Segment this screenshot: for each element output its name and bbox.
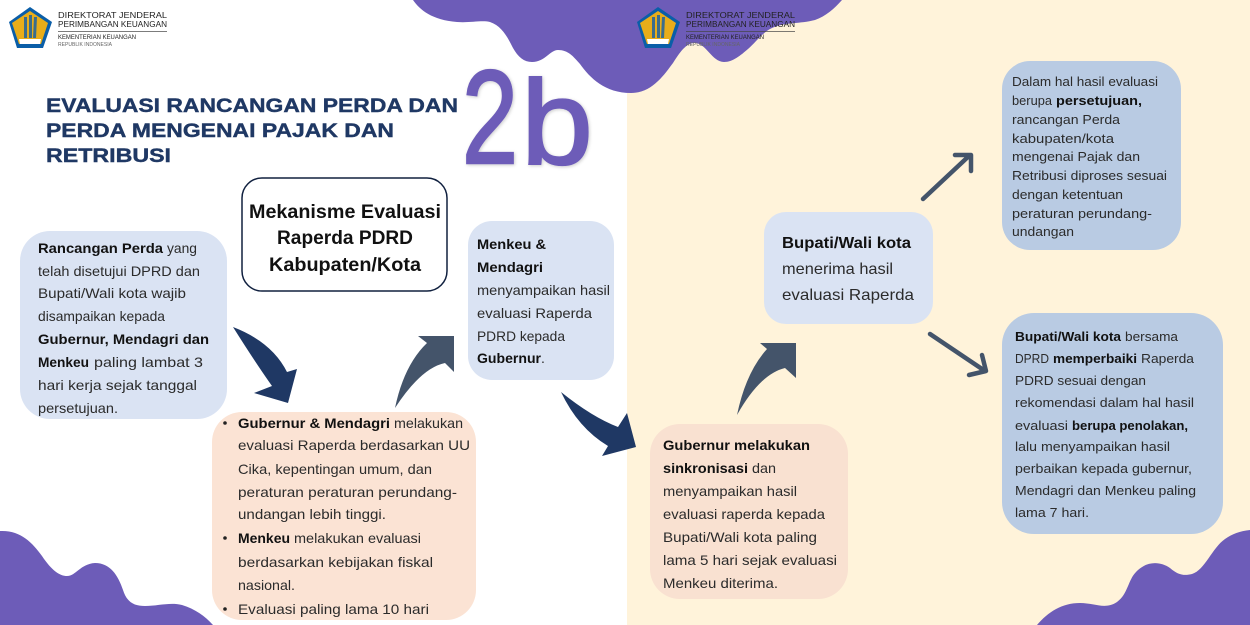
panel: rancangan perda: yang <box>167 240 197 256</box>
panel: hasil penolakan: Raperda <box>1141 351 1195 366</box>
panel: gubernur dan mendagri evaluasi: Cika, kepentingan umum, dan <box>238 461 432 477</box>
decorative blob: top <box>413 0 842 93</box>
panel: gubernur dan mendagri evaluasi: melakukan <box>394 415 463 431</box>
panel: hasil persetujuan: dengan ketentuan <box>1012 187 1123 202</box>
section number 2b: 2 <box>462 44 518 192</box>
panel: gubernur dan mendagri evaluasi: Evaluasi paling lama 10 hari <box>238 601 429 617</box>
panel: gubernur dan mendagri evaluasi: nasional. <box>238 577 295 593</box>
panel: gubernur sinkronisasi: Menkeu diterima. <box>663 575 778 591</box>
decorative blob: bottom left <box>0 531 213 625</box>
panel: rancangan perda: Menkeu <box>38 354 89 370</box>
decorative blob: bottom right <box>1037 530 1250 625</box>
panel: rancangan perda: disampaikan kepada <box>38 308 165 324</box>
panel: hasil persetujuan: mengenai Pajak dan <box>1012 149 1140 164</box>
panel: hasil persetujuan: Retribusi diproses sesuai <box>1012 168 1167 183</box>
arrow: gubernur to bupati <box>737 343 796 415</box>
panel: gubernur dan mendagri evaluasi: melakukan evaluasi <box>294 530 421 546</box>
panel: hasil persetujuan: persetujuan, <box>1056 93 1142 108</box>
organisation name <box>58 11 168 48</box>
panel: gubernur sinkronisasi <box>650 424 848 599</box>
panel: gubernur sinkronisasi: menyampaikan hasil <box>663 483 797 499</box>
panel: mekanisme heading: Mekanisme Evaluasi <box>249 202 441 223</box>
organisation name: REPUBLIK INDONESIA <box>58 42 113 48</box>
logo: center header <box>637 7 796 48</box>
organisation name: KEMENTERIAN KEUANGAN <box>58 35 136 41</box>
section number 2b: b <box>521 56 593 190</box>
panel: rancangan perda: Gubernur, Mendagri dan <box>38 331 209 347</box>
panel: bupati menerima hasil <box>764 212 933 324</box>
arrow: evaluasi to menkeu <box>395 336 454 408</box>
panel: gubernur sinkronisasi: sinkronisasi <box>663 460 748 476</box>
panel: gubernur dan mendagri evaluasi: berdasarkan kebijakan fiskal <box>238 554 433 570</box>
panel: mekanisme heading <box>242 178 447 291</box>
panel: gubernur sinkronisasi: Bupati/Wali kota paling <box>663 529 817 545</box>
panel: hasil persetujuan: undangan <box>1012 224 1074 239</box>
panel: gubernur sinkronisasi: evaluasi raperda kepada <box>663 506 825 522</box>
panel: hasil penolakan: rekomendasi dalam hal hasil <box>1015 395 1194 410</box>
section number 2b <box>462 44 593 192</box>
panel: gubernur sinkronisasi: lama 5 hari sejak evaluasi <box>663 552 837 568</box>
organisation name: PERIMBANGAN KEUANGAN <box>58 20 167 29</box>
panel: menkeu dan mendagri: menyampaikan hasil <box>477 282 610 298</box>
panel: rancangan perda: telah disetujui DPRD dan <box>38 263 200 279</box>
panel: hasil persetujuan: Dalam hal hasil evaluasi <box>1012 74 1158 89</box>
panel: bupati menerima hasil: menerima hasil <box>782 261 893 278</box>
panel: gubernur dan mendagri evaluasi <box>212 412 476 620</box>
panel: gubernur dan mendagri evaluasi: Gubernur & Mendagri <box>238 415 390 431</box>
panel: hasil penolakan <box>1002 313 1223 534</box>
panel: hasil penolakan: evaluasi <box>1015 418 1068 433</box>
panel: hasil penolakan: perbaikan kepada gubernur, <box>1015 461 1192 476</box>
panel: rancangan perda: persetujuan. <box>38 400 118 416</box>
panel: menkeu dan mendagri: Mendagri <box>477 259 543 275</box>
panel: hasil penolakan: Bupati/Wali kota <box>1015 329 1122 344</box>
panel: menkeu dan mendagri: evaluasi Raperda <box>477 305 592 321</box>
title: PERDA MENGENAI PAJAK DAN <box>46 121 394 142</box>
panel: hasil penolakan: Mendagri dan Menkeu paling <box>1015 483 1196 498</box>
panel: hasil penolakan: DPRD <box>1015 351 1049 366</box>
panel: bupati menerima hasil: Bupati/Wali kota <box>782 235 911 252</box>
panel: hasil penolakan: PDRD sesuai dengan <box>1015 373 1146 388</box>
panel: hasil persetujuan: kabupaten/kota <box>1012 131 1115 146</box>
title <box>46 96 458 167</box>
panel: rancangan perda: Bupati/Wali kota wajib <box>38 285 186 301</box>
panel: rancangan perda: hari kerja sejak tanggal <box>38 377 197 393</box>
logo: left header <box>9 7 168 48</box>
arrow: rancangan to gubernur <box>233 327 297 403</box>
panel: gubernur dan mendagri evaluasi: evaluasi Raperda berdasarkan UU <box>238 437 470 453</box>
emblem <box>637 7 680 48</box>
panel: hasil penolakan: memperbaiki <box>1053 351 1137 366</box>
panel: rancangan perda: Rancangan Perda <box>38 240 163 256</box>
organisation name: REPUBLIK INDONESIA <box>686 42 741 48</box>
title: EVALUASI RANCANGAN PERDA DAN <box>46 96 458 117</box>
panel: menkeu dan mendagri: PDRD kepada <box>477 328 565 344</box>
panel: mekanisme heading: Raperda PDRD <box>277 228 413 249</box>
organisation name <box>686 11 796 48</box>
arrow: bupati to persetujuan <box>923 155 971 199</box>
organisation name: DIREKTORAT JENDERAL <box>686 11 796 20</box>
panel: menkeu dan mendagri: . <box>541 350 545 366</box>
panel: rancangan perda: paling lambat 3 <box>94 354 203 370</box>
panel: hasil penolakan: berupa penolakan, <box>1072 418 1188 433</box>
arrow: bupati to penolakan <box>930 334 986 375</box>
panel: hasil persetujuan <box>1002 61 1181 250</box>
panel: gubernur sinkronisasi: Gubernur melakukan <box>663 437 810 453</box>
panel: hasil persetujuan: rancangan Perda <box>1012 112 1121 127</box>
panel: gubernur sinkronisasi: dan <box>752 460 776 476</box>
panel: hasil penolakan: lama 7 hari. <box>1015 505 1089 520</box>
panel: rancangan perda <box>20 231 227 419</box>
panel: hasil persetujuan: berupa <box>1012 93 1053 108</box>
title: RETRIBUSI <box>46 146 171 167</box>
background: cream right half <box>627 0 1250 625</box>
panel: gubernur dan mendagri evaluasi: Menkeu <box>238 530 290 546</box>
panel: hasil persetujuan: peraturan perundang- <box>1012 206 1152 221</box>
panel: bupati menerima hasil: evaluasi Raperda <box>782 287 914 304</box>
panel: gubernur dan mendagri evaluasi: undangan lebih tinggi. <box>238 506 386 522</box>
panel: menkeu dan mendagri: Gubernur <box>477 350 542 366</box>
panel: hasil penolakan: bersama <box>1125 329 1179 344</box>
panel: menkeu dan mendagri <box>468 221 614 380</box>
panel: hasil penolakan: lalu menyampaikan hasil <box>1015 439 1170 454</box>
panel: menkeu dan mendagri: Menkeu & <box>477 236 546 252</box>
organisation name: PERIMBANGAN KEUANGAN <box>686 20 795 29</box>
panel: mekanisme heading: Kabupaten/Kota <box>269 255 421 276</box>
panel: gubernur dan mendagri evaluasi: peraturan peraturan perundang- <box>238 484 457 500</box>
arrow: menkeu to gubernur <box>561 392 636 456</box>
organisation name: DIREKTORAT JENDERAL <box>58 11 168 20</box>
organisation name: KEMENTERIAN KEUANGAN <box>686 35 764 41</box>
emblem <box>9 7 52 48</box>
